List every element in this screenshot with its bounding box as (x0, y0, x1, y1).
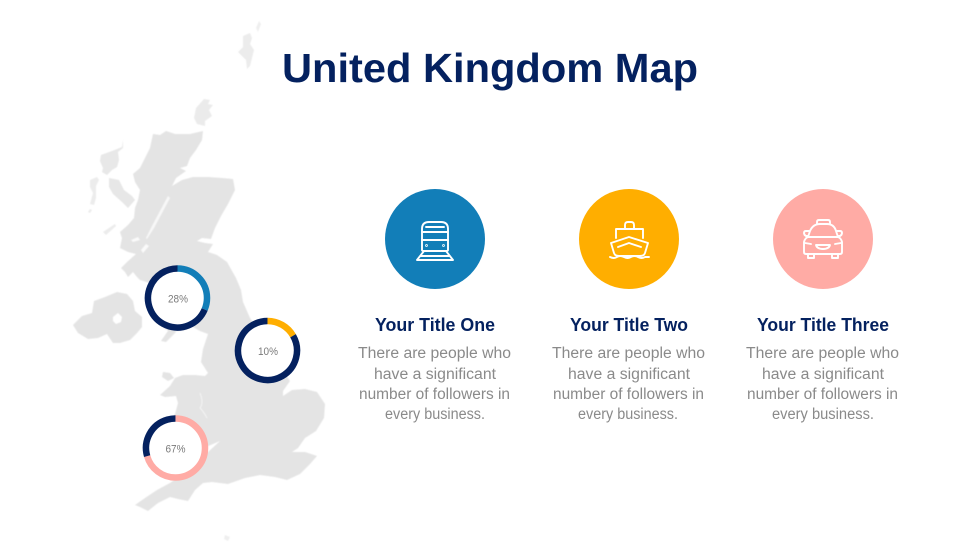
donut chart: 28% (139, 259, 216, 337)
text block (358, 345, 511, 423)
white sea lochs (146, 196, 170, 239)
text block (552, 345, 705, 423)
text block: There are people who (358, 345, 511, 362)
Shetland (256, 21, 261, 32)
text block: number of followers in (359, 386, 510, 403)
Outer Hebrides (100, 140, 123, 175)
text block: every business. (578, 406, 678, 423)
Isle of Man (161, 328, 176, 342)
donut chart: 10% (227, 310, 308, 391)
panel: column two (552, 189, 705, 423)
icon: taxi (773, 189, 873, 289)
donut chart: 67% (139, 412, 212, 484)
Anglesey (162, 372, 174, 381)
heading: Your Title Three: Your Title Three (757, 315, 889, 335)
map of the United Kingdom (73, 21, 325, 541)
Scilly (224, 535, 230, 541)
panel: column three (746, 189, 899, 423)
text block: There are people who (552, 345, 705, 362)
donut chart: 67%: 67% (166, 444, 186, 456)
title: United Kingdom Map (282, 45, 698, 91)
text block: every business. (772, 406, 874, 423)
panel: column one (358, 189, 511, 423)
text block: have a significant (374, 366, 497, 383)
icon: train (385, 189, 485, 289)
Northern Ireland (73, 292, 142, 343)
donut chart: 28%: 28% (168, 294, 188, 306)
icon: ship (579, 189, 679, 289)
heading: Your Title Two: Your Title Two (570, 315, 688, 335)
donut chart: 10%: 10% (258, 346, 278, 358)
heading: Your Title One: Your Title One (375, 315, 495, 335)
text block (746, 345, 899, 423)
text block: every business. (385, 406, 485, 423)
text block: number of followers in (747, 386, 898, 403)
text block: number of followers in (553, 386, 704, 403)
Orkney (194, 99, 213, 126)
text block: have a significant (568, 366, 691, 383)
Skye and Mull (109, 178, 135, 208)
text block: have a significant (762, 366, 885, 383)
text block: There are people who (746, 345, 899, 362)
